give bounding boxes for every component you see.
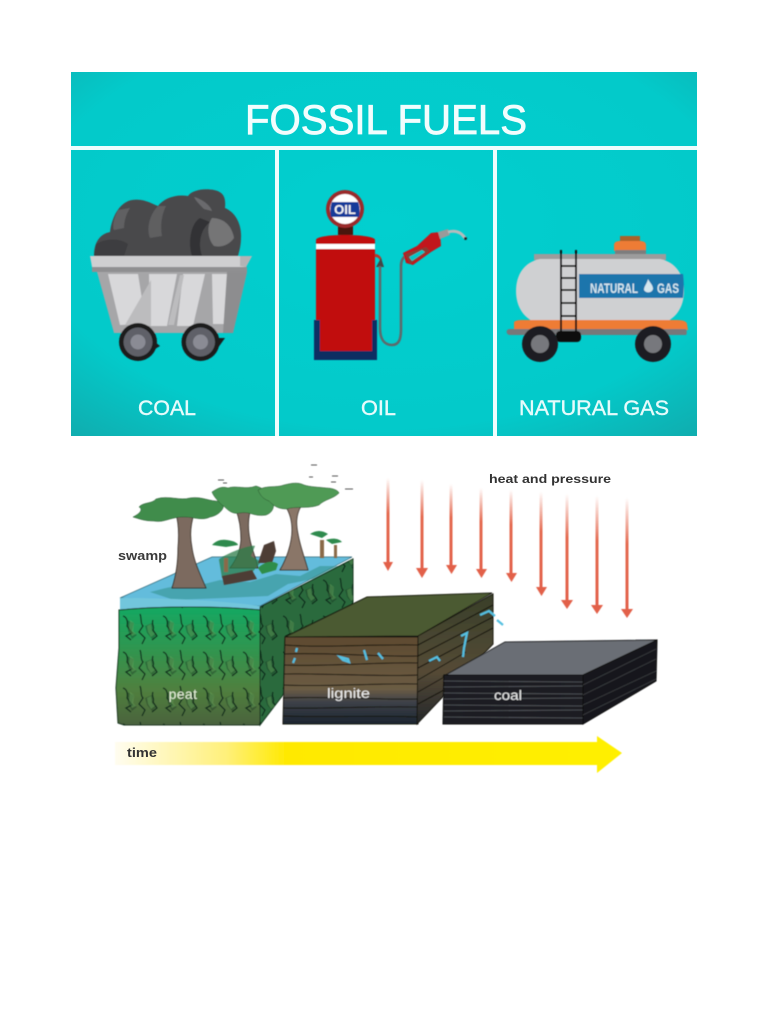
icon: oil pump: OIL [334, 202, 356, 217]
panel: fossil fuels [71, 72, 697, 436]
diagram: coal formation [115, 465, 657, 773]
arrows: heat and pressure [383, 478, 633, 618]
arrow: time [115, 736, 622, 773]
lignite block [283, 593, 503, 724]
label: natural gas: NATURAL GAS [519, 397, 669, 420]
icon: natural gas tanker: NATURAL [590, 280, 638, 296]
trees and swamp [133, 465, 353, 588]
label: time: time [127, 745, 157, 760]
birds [218, 465, 353, 489]
label: oil: OIL [361, 397, 396, 420]
label: heat and pressure: heat and pressure [489, 474, 611, 486]
label: peat: peat [169, 686, 197, 702]
icon: natural gas tanker: GAS [657, 280, 679, 296]
icon: coal cart [90, 189, 252, 361]
label: lignite: lignite [327, 686, 370, 701]
peat block [116, 557, 353, 725]
icon: oil pump [314, 190, 467, 360]
label: coal: coal [494, 688, 522, 703]
icon: natural gas tanker [507, 236, 688, 362]
label: coal: COAL [138, 397, 196, 420]
title: FOSSIL FUELS [245, 96, 527, 143]
label: swamp: swamp [118, 548, 167, 563]
coal block [443, 640, 657, 724]
